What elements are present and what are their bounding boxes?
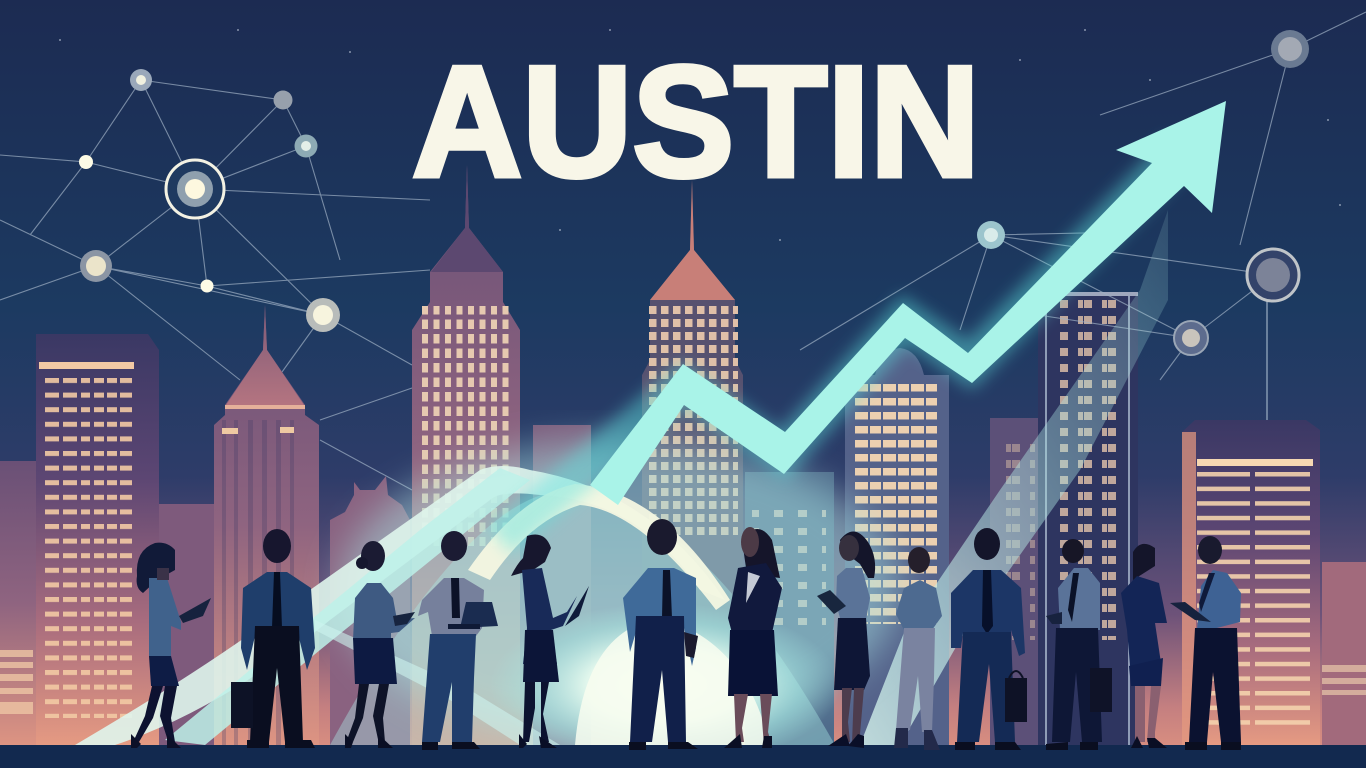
ribbon: pale lower-left arc [75, 466, 725, 745]
tower: tall central-left skyscraper [412, 165, 520, 745]
person 2: man with briefcase [231, 529, 315, 748]
person 7: woman in suit [724, 527, 782, 748]
person 10: man with bag [951, 528, 1027, 750]
node: lower left [80, 250, 112, 282]
person 13: man with tablet [1170, 536, 1241, 750]
node: white small [79, 155, 93, 169]
person 12: woman in navy suit [1121, 544, 1167, 748]
person 11: man with bag [1046, 539, 1112, 750]
node: large ringed hub [166, 160, 224, 218]
ribbon: lower teal chart line [165, 468, 530, 745]
node: small white lower [200, 280, 214, 292]
windows: right edge block [1322, 665, 1366, 695]
tower: pointed left tower [214, 305, 319, 745]
building: right edge low block [1322, 562, 1366, 745]
glow: light haze behind crowd [340, 440, 900, 740]
node: large ring right [1247, 249, 1299, 301]
tower: far-left office block [36, 334, 159, 745]
node: small top [130, 69, 152, 91]
glow: teal arch wash [330, 490, 835, 745]
building: right narrow tower [990, 418, 1045, 745]
node: top right [1271, 30, 1309, 68]
node: teal mid [977, 221, 1005, 249]
person 3: woman with tablet [345, 541, 415, 748]
translucent light wedge under arrow [860, 210, 1168, 745]
skyline: main towers [36, 165, 1320, 745]
network line: vertical to right tower [1266, 300, 1268, 420]
network graph: right constellation [800, 12, 1366, 380]
tower: narrow windows right [996, 440, 1036, 640]
ribbon: cross stroke [315, 620, 560, 745]
ribbon: second cream arc [468, 484, 730, 610]
tower: tall right tower [1038, 292, 1138, 745]
person 4: man with laptop [418, 531, 498, 750]
building: far-left low block [0, 461, 40, 745]
building: small block centre-left [330, 476, 410, 745]
person 1: woman with tablet [131, 543, 211, 748]
skyline: back buildings [0, 418, 1366, 745]
building: left low block windows [0, 650, 33, 714]
person 6: man in shirt [623, 519, 698, 750]
network graph: left constellation [0, 69, 430, 490]
building: low centre right block [745, 472, 834, 745]
growth chart ribbons [75, 101, 1226, 745]
glow: central white dome [490, 603, 840, 767]
node: lower right [306, 298, 340, 332]
node: grey top right [274, 90, 292, 110]
title: AUSTIN [412, 34, 980, 210]
tower: central skyscraper with red roof [642, 180, 743, 745]
glow: arrow halo [500, 150, 1180, 540]
people group [131, 519, 1241, 750]
person 8: woman with ponytail [817, 531, 875, 748]
tower: right office block [1182, 420, 1320, 745]
glow: inner dome [575, 618, 770, 745]
person 5: woman with tablet [511, 534, 589, 748]
node: lower right [1174, 321, 1208, 355]
windows: low centre right block [752, 510, 826, 630]
building: small block by left tower [158, 504, 218, 745]
node: teal small [294, 134, 318, 158]
arrow: rising teal zigzag [590, 101, 1226, 505]
tower: centre right office block [845, 348, 949, 745]
ground strip [0, 745, 1366, 768]
building: centre back block [533, 425, 591, 745]
stars [59, 29, 1341, 241]
person 9: woman in light trousers [894, 547, 942, 750]
